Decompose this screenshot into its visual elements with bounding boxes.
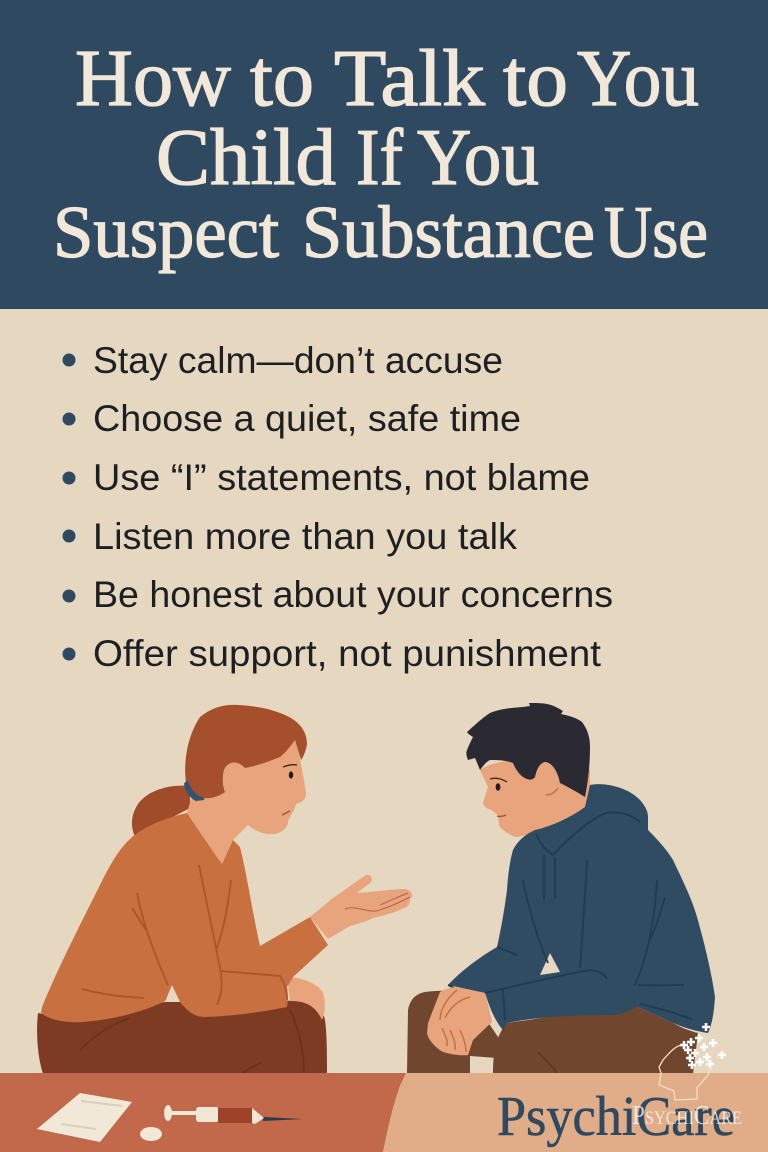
hoodie creases: [448, 812, 692, 1020]
title: If: [356, 112, 403, 202]
panel: header banner: [0, 0, 768, 309]
illustration: teen: [407, 703, 715, 1074]
bullet list: Stay calm—don’t accuse: [93, 340, 503, 381]
trousers: [37, 1000, 327, 1074]
sweater gap: [165, 987, 180, 1002]
title: Use: [604, 192, 708, 274]
icon: syringe: [164, 1105, 303, 1124]
sweater: [41, 813, 328, 1022]
scrunchie: [185, 782, 204, 800]
knee hand: [287, 977, 325, 1020]
hands: [427, 987, 492, 1055]
face and neck: [480, 759, 590, 837]
title: to: [250, 33, 314, 123]
hoodie: [448, 784, 715, 1033]
neck and face: [187, 739, 306, 864]
logo: PsychiCare watermark: PSYCHICARE: [632, 1100, 742, 1130]
title: Suspect: [53, 192, 279, 274]
hoodie gap: [540, 953, 560, 975]
title: [53, 33, 708, 274]
bullet list: Choose a quiet, safe time: [93, 398, 521, 439]
face details: [496, 783, 500, 791]
raised hand: [310, 875, 412, 939]
logo: head with crosses: [659, 1023, 726, 1100]
icon: paper note: [37, 1093, 132, 1142]
icon: pill: [140, 1127, 162, 1141]
illustration: mother: [37, 705, 412, 1074]
panel: footer bar: [0, 1073, 768, 1152]
bullet list: Listen more than you talk: [93, 516, 518, 557]
ear: [223, 762, 245, 792]
logo: PsychiCare wordmark: PsychiCare: [497, 1086, 735, 1148]
bullet list: Offer support, not punishment: [93, 633, 602, 674]
title: You: [577, 33, 699, 123]
title: You: [417, 112, 539, 202]
bullet list: [62, 340, 613, 674]
hair: [466, 703, 590, 797]
far leg: [407, 991, 500, 1074]
title: How: [75, 33, 231, 123]
ear: [533, 762, 560, 797]
title: Child: [156, 112, 336, 202]
hair: [185, 705, 307, 798]
face details: [289, 771, 293, 779]
bullet list: Be honest about your concerns: [93, 574, 613, 615]
ponytail: [132, 786, 190, 837]
near leg: [493, 1007, 698, 1074]
bullet list: Use “I” statements, not blame: [93, 457, 590, 498]
title: to: [503, 33, 568, 123]
sweater creases: [82, 865, 287, 1005]
title: Substance: [302, 192, 595, 274]
title: Talk: [334, 33, 486, 123]
